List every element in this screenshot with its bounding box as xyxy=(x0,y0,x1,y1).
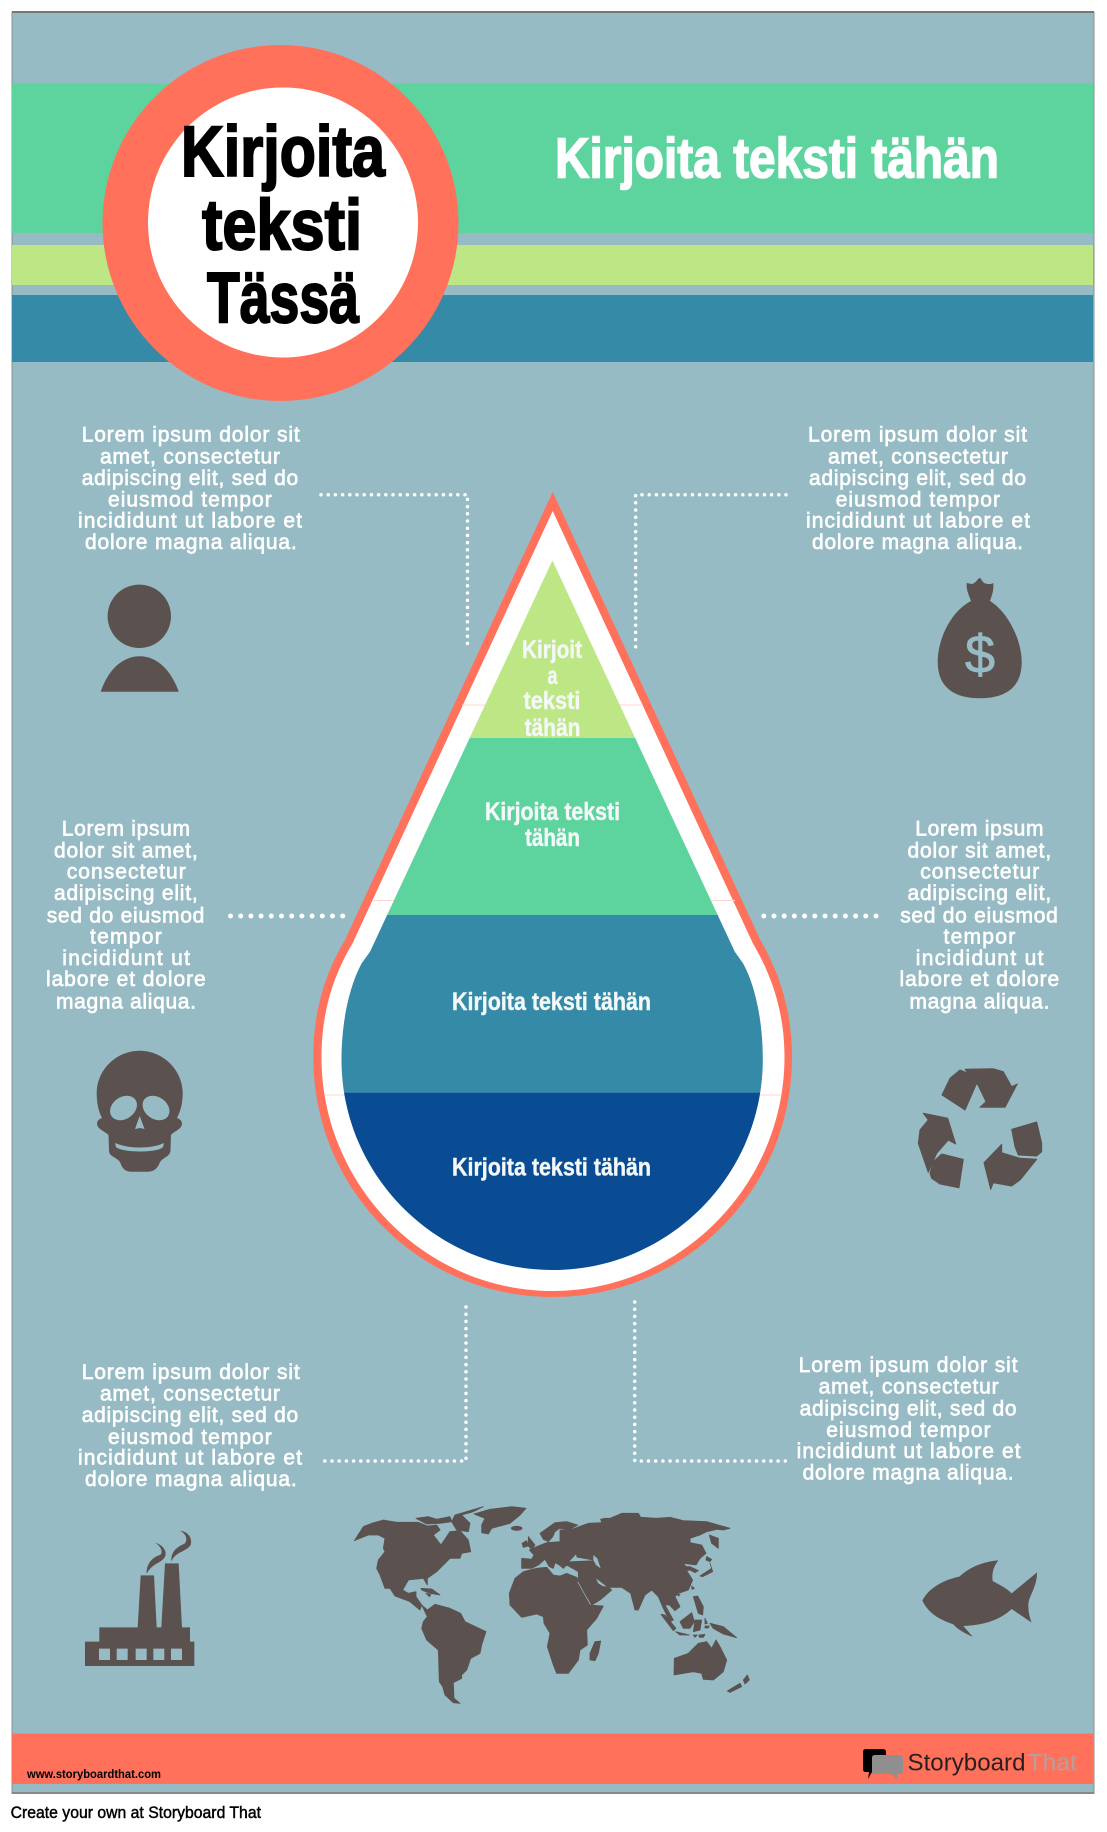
logo: Storyboard That xyxy=(863,1749,1077,1779)
layer: blue xyxy=(330,915,775,1093)
text block: middle right: magna aliqua. xyxy=(910,990,1050,1013)
blue layer label: Kirjoita teksti tähän xyxy=(452,988,651,1016)
icon: factory xyxy=(85,1531,194,1666)
text block: bottom left: Lorem ipsum dolor sit xyxy=(82,1361,300,1384)
bottom edge of the panel xyxy=(12,1792,1094,1794)
text block: middle left: magna aliqua. xyxy=(56,990,196,1013)
text block: middle right: tempor xyxy=(944,925,1015,948)
connector: bottom right xyxy=(635,1302,787,1461)
header band: lime xyxy=(12,245,1093,285)
text block: bottom left xyxy=(78,1361,302,1491)
heading: subtitle: Kirjoita teksti tähän xyxy=(555,126,999,190)
icon: fish xyxy=(922,1560,1037,1637)
text block: bottom right: adipiscing elit, sed do xyxy=(800,1397,1017,1420)
drop inner white area xyxy=(322,511,784,1291)
header band: blue xyxy=(12,295,1093,362)
green layer label: tähän xyxy=(525,824,580,852)
text block: top left xyxy=(78,424,302,554)
text block: bottom right: dolore magna aliqua. xyxy=(803,1461,1014,1484)
logo wordmark light: That xyxy=(1028,1750,1077,1776)
title badge xyxy=(102,45,458,401)
icon: person xyxy=(101,585,179,692)
icon: world map xyxy=(354,1507,749,1703)
icon: skull xyxy=(97,1051,183,1172)
text block: middle left: Lorem ipsum xyxy=(62,818,190,841)
navy layer label: Kirjoita teksti tähän xyxy=(452,1154,651,1182)
text block: middle right: sed do eiusmod xyxy=(900,904,1058,927)
text block: bottom right: Lorem ipsum dolor sit xyxy=(799,1354,1018,1377)
green layer label: Kirjoita teksti xyxy=(485,798,620,826)
text block: bottom left: dolore magna aliqua. xyxy=(85,1468,297,1491)
connector: middle right xyxy=(760,914,876,918)
text block: bottom left: amet, consectetur xyxy=(100,1382,280,1406)
Eurasia and nearby islands xyxy=(522,1513,737,1638)
text block: top right: amet, consectetur xyxy=(828,445,1008,468)
layer: green xyxy=(387,738,718,915)
drop outline xyxy=(313,492,792,1297)
text block: bottom right xyxy=(797,1354,1021,1484)
text block: middle right: labore et dolore xyxy=(900,968,1059,991)
text block: middle right: Lorem ipsum xyxy=(915,818,1044,841)
logo wordmark: Storyboard xyxy=(908,1750,1026,1776)
icon: recycle arrows xyxy=(918,1069,1042,1189)
text block: middle left: tempor xyxy=(90,925,162,948)
text block: top left: amet, consectetur xyxy=(100,445,280,468)
text block: top right: adipiscing elit, sed do xyxy=(809,467,1026,490)
text block: top right: incididunt ut labore et xyxy=(806,510,1030,532)
water drop diagram xyxy=(313,492,792,1297)
top edge of the panel xyxy=(12,11,1094,13)
logo speech bubbles xyxy=(863,1749,903,1779)
text block: top right: dolore magna aliqua. xyxy=(812,531,1023,554)
title text xyxy=(181,113,385,338)
title text: Kirjoita xyxy=(181,113,385,192)
layer: lime xyxy=(470,560,636,738)
text block: middle left: incididunt ut xyxy=(62,947,190,970)
connector: bottom left xyxy=(318,1307,466,1461)
faint divider marks xyxy=(325,705,781,1095)
text block: middle left: adipiscing elit, xyxy=(54,882,198,905)
text block: middle right: consectetur xyxy=(920,860,1039,883)
lime layer label: teksti xyxy=(524,687,580,715)
text block: middle right: adipiscing elit, xyxy=(908,882,1051,905)
text block: middle left: consectetur xyxy=(67,860,186,883)
text block: middle right xyxy=(900,818,1059,1013)
text block: bottom left: adipiscing elit, sed do xyxy=(82,1404,298,1427)
text block: middle right: incididunt ut xyxy=(916,947,1044,970)
lime layer label: Kirjoit xyxy=(522,636,583,664)
title text: teksti xyxy=(202,186,362,266)
icon: money bag: $ xyxy=(965,625,995,685)
text block: top right: eiusmod tempor xyxy=(836,489,1000,512)
text block: top left: adipiscing elit, sed do xyxy=(82,467,298,490)
title text: Tässä xyxy=(207,260,359,338)
text block: top right xyxy=(806,424,1030,554)
lime layer label xyxy=(522,636,583,742)
lime layer label: tähän xyxy=(524,714,580,742)
text block: top left: Lorem ipsum dolor sit xyxy=(82,424,300,447)
text block: bottom right: eiusmod tempor xyxy=(826,1419,991,1442)
text block: bottom left: incididunt ut labore et xyxy=(78,1447,302,1470)
text block: bottom right: amet, consectetur xyxy=(819,1376,999,1399)
text block: top left: incididunt ut labore et xyxy=(78,510,302,532)
lime layer label: a xyxy=(548,662,558,690)
text block: middle left: sed do eiusmod xyxy=(47,904,204,927)
text block: top left: eiusmod tempor xyxy=(108,489,272,512)
footer band xyxy=(12,1734,1093,1784)
text block: middle left: dolor sit amet, xyxy=(54,839,198,862)
text block: middle right: dolor sit amet, xyxy=(908,839,1051,862)
text block: bottom left: eiusmod tempor xyxy=(108,1426,272,1449)
text block: bottom right: incididunt ut labore et xyxy=(797,1440,1021,1463)
text block: middle left: labore et dolore xyxy=(46,968,206,991)
layer: navy xyxy=(330,1093,775,1273)
text block: middle left xyxy=(46,818,206,1013)
connector: top right xyxy=(636,495,786,652)
connector: top left xyxy=(321,495,468,650)
green layer label xyxy=(485,798,620,852)
connector: middle left xyxy=(228,914,343,918)
text block: top left: dolore magna aliqua. xyxy=(85,531,297,554)
icon: money bag xyxy=(938,578,1022,698)
header band: green xyxy=(12,84,1093,233)
footer url: www.storyboardthat.com xyxy=(26,1767,161,1781)
caption below poster: Create your own at Storyboard That xyxy=(11,1804,261,1822)
drop layers xyxy=(330,550,775,1273)
text block: top right: Lorem ipsum dolor sit xyxy=(808,424,1027,447)
